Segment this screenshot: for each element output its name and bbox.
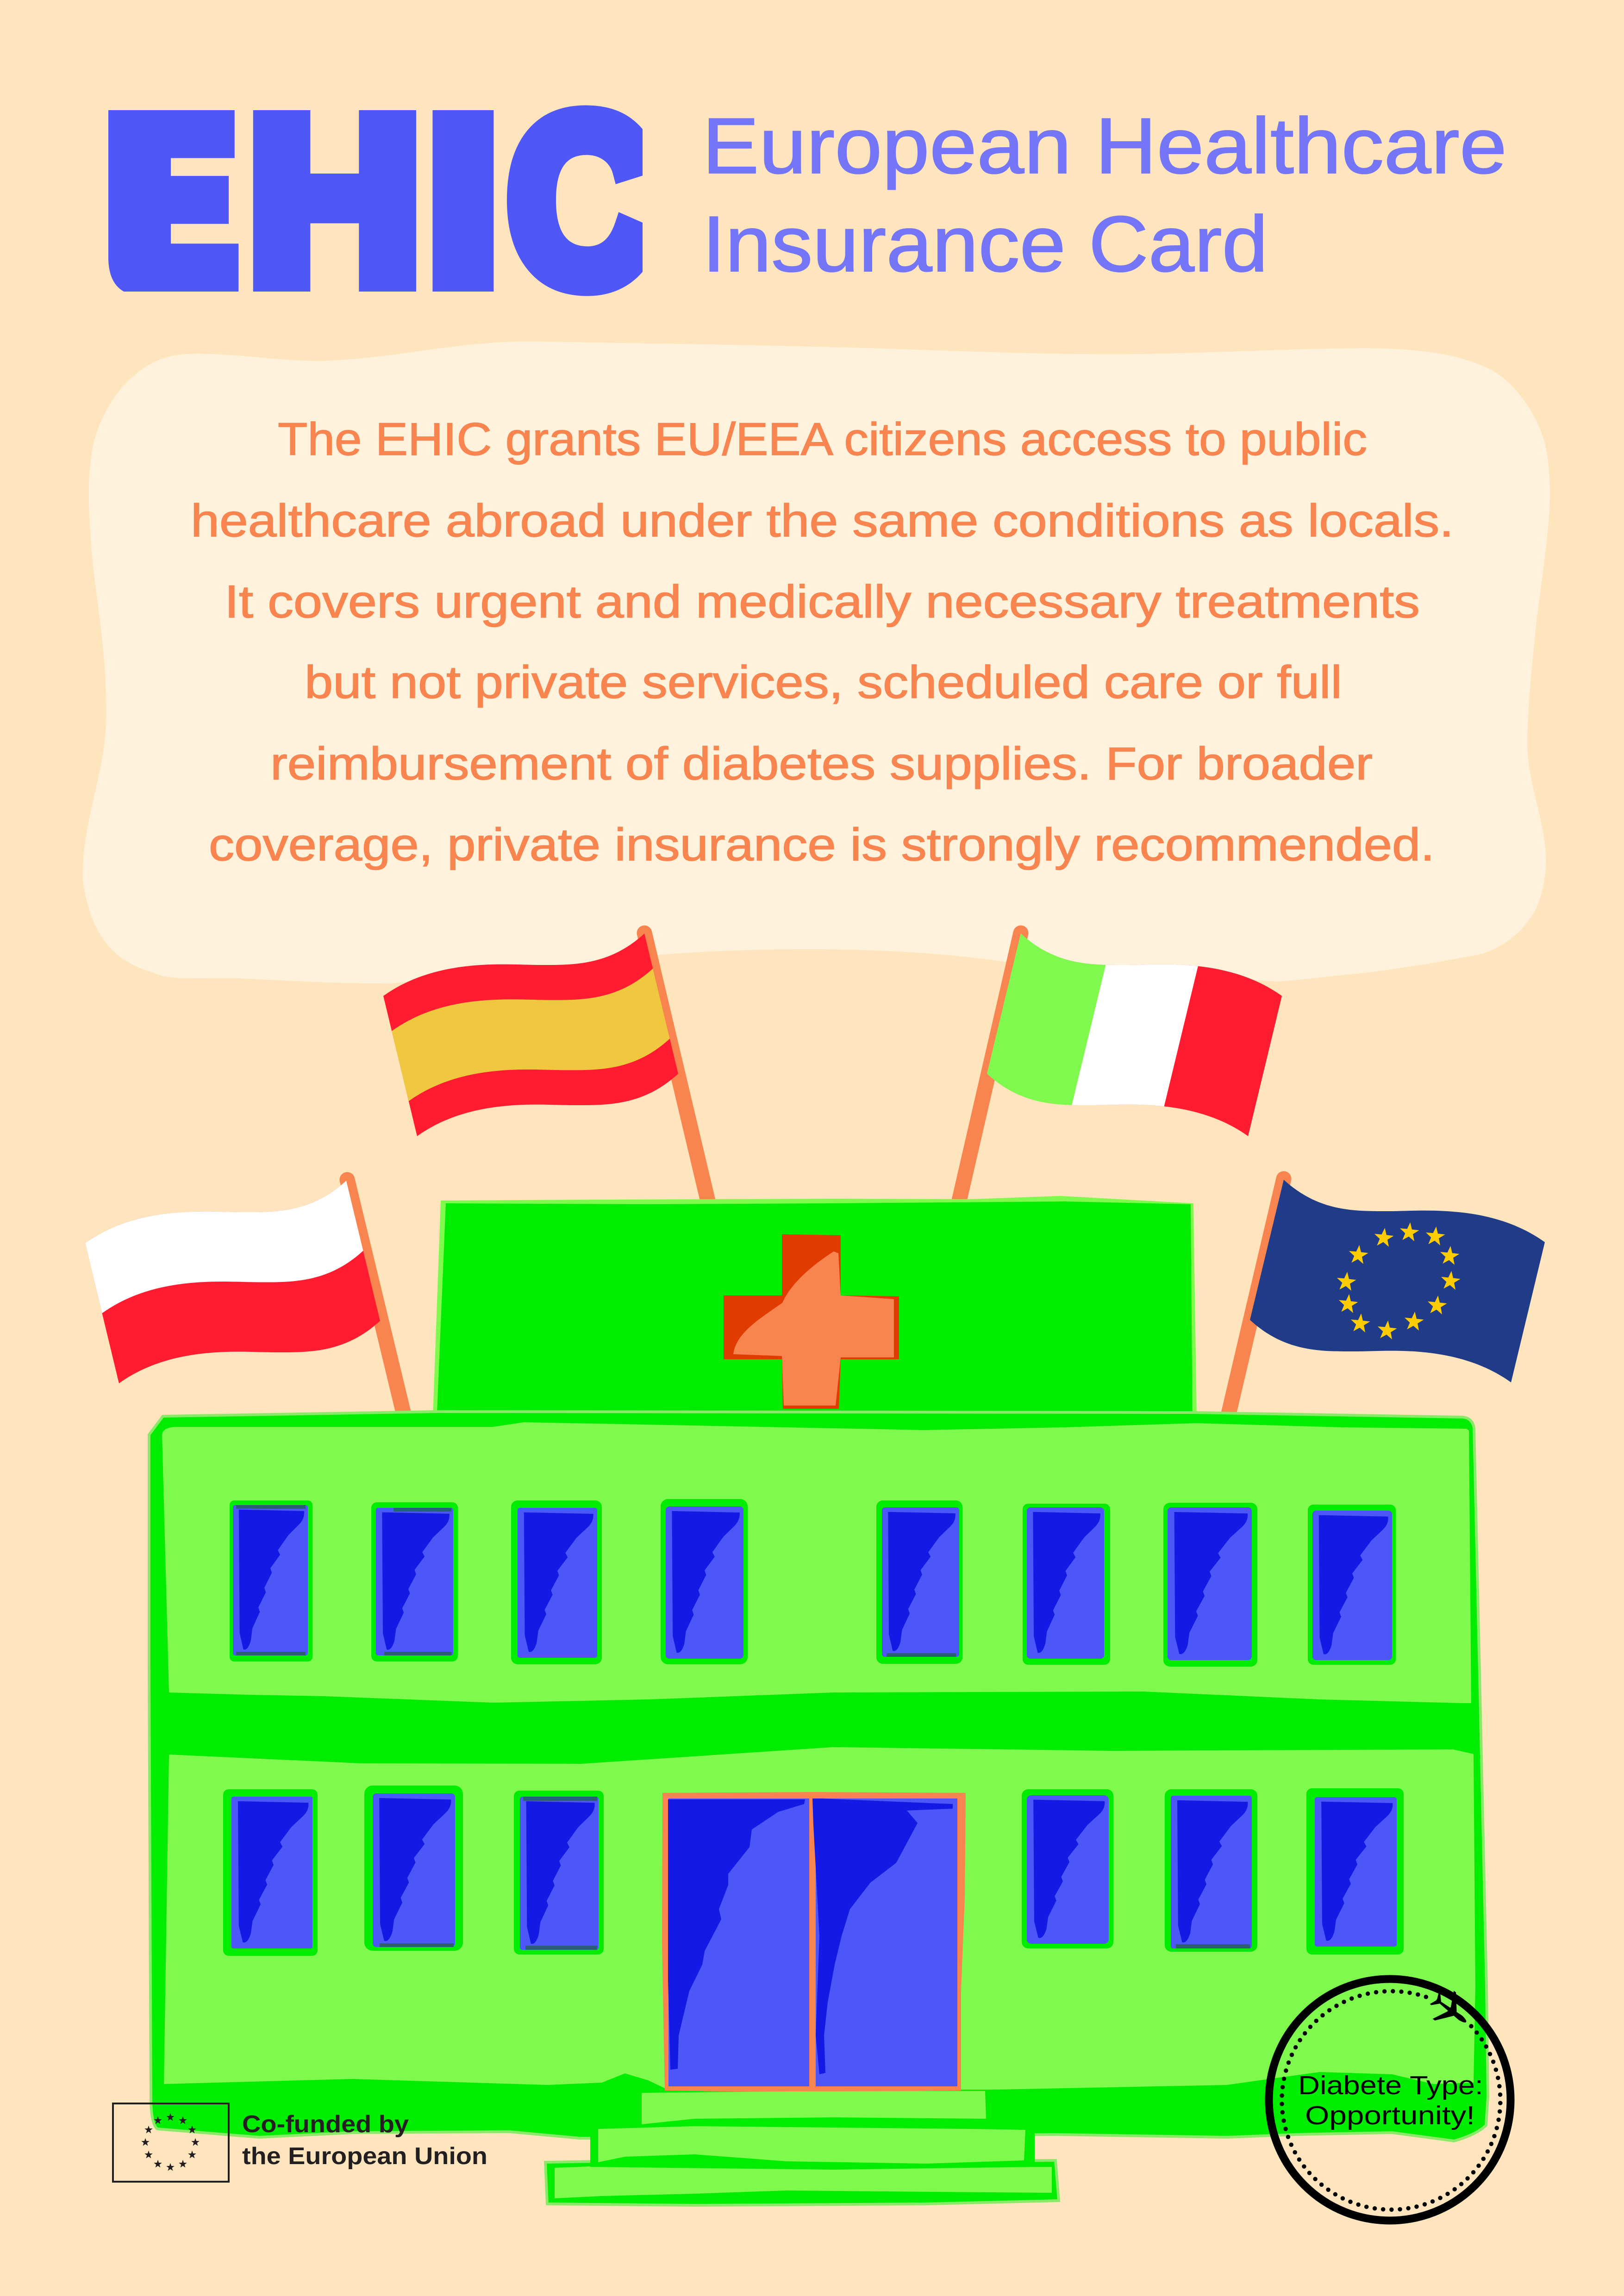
subtitle: European Healthcare Insurance Card: European Healthcare <box>702 102 1507 190</box>
text block: description: healthcare abroad under the same conditions as locals. <box>191 495 1454 546</box>
window upper 1 <box>230 1500 312 1661</box>
window lower 4 <box>1022 1789 1113 1948</box>
logo: co-funded by the European Union <box>113 2103 487 2182</box>
title: EHIC: C <box>508 68 656 333</box>
text block: description: but not private services, scheduled care or full <box>305 656 1342 708</box>
stamp text: Diabete Type: <box>1298 2071 1483 2100</box>
window upper 3 <box>511 1500 602 1664</box>
building <box>149 1196 1488 2205</box>
panel: description blob <box>83 342 1550 983</box>
title: EHIC: I <box>428 71 499 330</box>
title: EHIC <box>108 106 643 296</box>
window upper 8 <box>1308 1505 1396 1665</box>
window upper 6 <box>1023 1504 1110 1665</box>
step 1 <box>642 2091 986 2124</box>
icon: plane <box>1424 1984 1477 2036</box>
icon: medical cross <box>724 1234 899 1409</box>
flag: Poland <box>85 1181 380 1383</box>
window upper 7 <box>1163 1503 1257 1667</box>
building: lower storey wall <box>164 1747 1475 2090</box>
window lower 2 <box>364 1786 463 1951</box>
text block: description: reimbursement of diabetes supplies. For broader <box>270 738 1373 789</box>
subtitle: European Healthcare Insurance Card <box>702 102 1507 288</box>
text block: description: It covers urgent and medically necessary treatments <box>225 576 1420 627</box>
steps <box>545 2091 1059 2205</box>
window lower 1 <box>223 1789 318 1956</box>
logo frame <box>113 2103 229 2182</box>
step 3 <box>545 2160 1059 2205</box>
subtitle: European Healthcare Insurance Card: Insurance Card <box>702 200 1268 288</box>
logo stars <box>141 2113 200 2171</box>
title: EHIC: H <box>249 71 421 330</box>
building: roof block <box>433 1196 1197 1435</box>
window upper 4 <box>661 1499 748 1664</box>
window lower 5 <box>1165 1789 1257 1952</box>
stamp text: Opportunity! <box>1305 2101 1475 2130</box>
stamp text <box>1298 2071 1483 2130</box>
stamp: Diabete Type Opportunity <box>1269 1979 1511 2221</box>
step 2 <box>590 2122 1035 2170</box>
flag: Italy <box>987 933 1282 1136</box>
building: upper storey wall <box>162 1422 1471 1703</box>
window upper 2 <box>371 1502 458 1661</box>
logo text <box>242 2111 487 2170</box>
flag poles <box>347 933 1284 1425</box>
flag: European Union <box>1250 1180 1545 1382</box>
title: EHIC: E <box>106 72 237 330</box>
text block: description: The EHIC grants EU/EEA citizens access to public <box>278 413 1367 465</box>
logo text: Co-funded by <box>242 2111 409 2138</box>
stamp dotted ring <box>1282 1991 1500 2209</box>
window lower 6 <box>1306 1788 1404 1954</box>
building: main body outline <box>149 1412 1488 2141</box>
text block: description <box>191 413 1454 870</box>
logo text: the European Union <box>242 2143 487 2170</box>
stamp ring <box>1269 1979 1511 2221</box>
window upper 5 <box>876 1500 962 1664</box>
text block: description: coverage, private insurance is strongly recommended. <box>209 819 1435 870</box>
flag: Spain <box>383 933 678 1136</box>
window lower 3 <box>514 1791 604 1954</box>
door <box>662 1792 966 2093</box>
